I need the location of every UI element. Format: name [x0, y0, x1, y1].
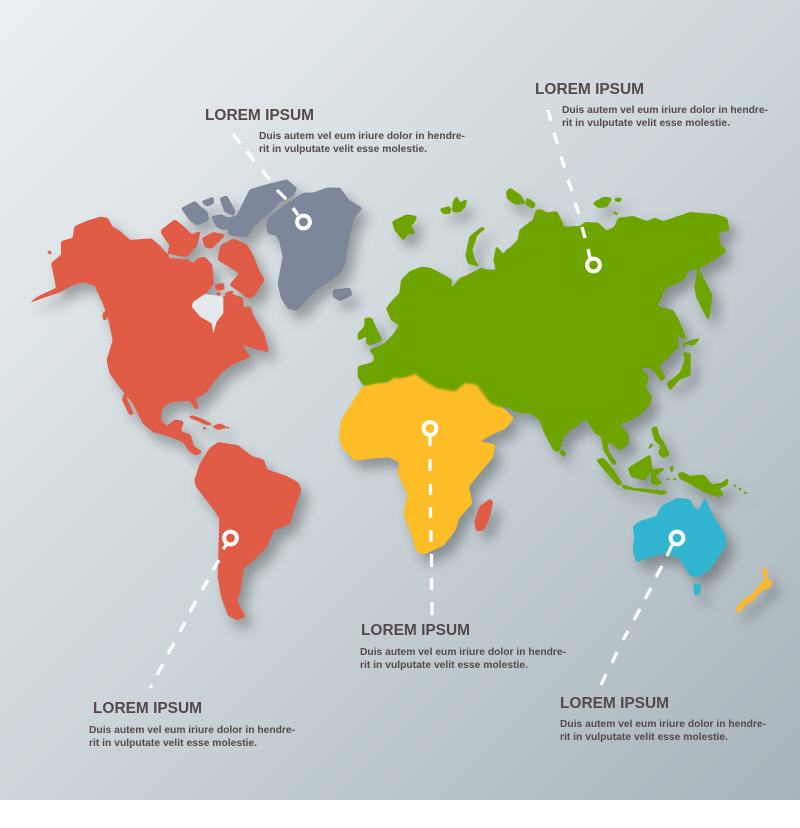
Eurasia: [358, 188, 729, 465]
pin: Asia: [587, 259, 600, 271]
callout: Asia: rit in vulputate velit esse molestie.: [562, 118, 730, 129]
callout: Australia: Duis autem vel eum iriure dolor in hendre-: [560, 719, 766, 730]
Greenland and Arctic islands: [182, 180, 362, 310]
callout: South America: rit in vulputate velit esse molestie.: [89, 738, 257, 749]
pin: Greenland: [297, 216, 310, 228]
callout: Asia: [535, 81, 768, 129]
connector: Africa: [430, 437, 432, 615]
callout: Africa: Duis autem vel eum iriure dolor in hendre-: [360, 647, 566, 658]
pin: Australia: [671, 532, 683, 544]
callout: Australia: [560, 695, 766, 743]
pin: Africa: [424, 422, 436, 435]
connector: Greenland: [233, 134, 298, 215]
callout: Greenland: rit in vulputate velit esse molestie.: [259, 144, 427, 155]
South America: [195, 443, 301, 619]
Australia: [633, 498, 725, 595]
New Zealand: [737, 568, 773, 613]
callout: Greenland: [205, 107, 465, 155]
callout: Asia: Duis autem vel eum iriure dolor in hendre-: [562, 105, 768, 116]
connector: Asia: [548, 110, 590, 258]
Africa: [340, 374, 513, 553]
callout: Australia: rit in vulputate velit esse molestie.: [560, 732, 728, 743]
callout: Africa: [360, 622, 566, 671]
North America: [28, 217, 268, 455]
connector: Australia: [601, 545, 672, 685]
world map: [28, 180, 773, 619]
callout: Africa: rit in vulputate velit esse molestie.: [360, 660, 528, 671]
Hudson Bay: [192, 294, 223, 333]
pin: South America: [224, 532, 237, 544]
callout: South America: LOREM IPSUM: [93, 700, 202, 717]
callout: South America: Duis autem vel eum iriure dolor in hendre-: [89, 725, 295, 736]
callout: Greenland: LOREM IPSUM: [205, 107, 314, 124]
Madagascar: [475, 499, 493, 531]
callout: Africa: LOREM IPSUM: [361, 622, 470, 639]
connector: South America: [150, 544, 227, 688]
callout: South America: [89, 700, 295, 749]
callout: Greenland: Duis autem vel eum iriure dolor in hendre-: [259, 131, 465, 142]
callout: Asia: LOREM IPSUM: [535, 81, 644, 98]
Southeast Asian islands: [597, 427, 747, 497]
callout: Australia: LOREM IPSUM: [560, 695, 669, 712]
